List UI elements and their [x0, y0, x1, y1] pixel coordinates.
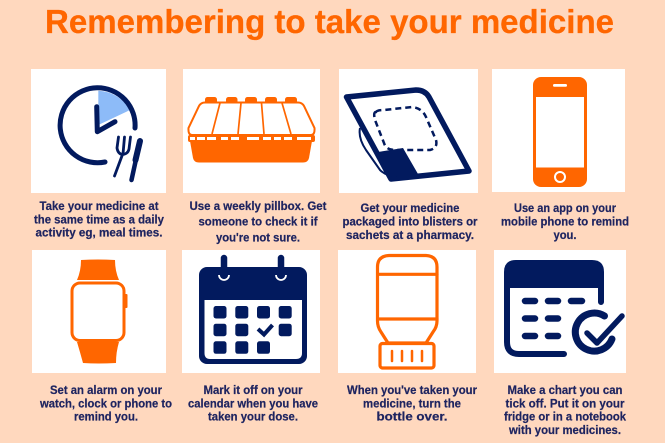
caption: Use a weekly pillbox. Get: [190, 201, 327, 213]
title: Remembering to take your medicine: [45, 4, 614, 41]
caption: the same time as a daily: [34, 214, 165, 226]
card: [31, 69, 166, 193]
panel: weekly pillbox: [183, 69, 327, 245]
caption: Get your medicine: [360, 203, 460, 215]
card: [338, 250, 476, 373]
caption: [347, 385, 478, 424]
caption: When you've taken your: [347, 385, 478, 397]
caption: with your medicines.: [508, 425, 621, 437]
icon: pillbox: [188, 97, 315, 162]
card: [182, 250, 320, 373]
caption: bottle over.: [376, 412, 448, 424]
icon: mobile phone: [533, 77, 587, 187]
panel: turn bottle over: [338, 250, 478, 424]
caption: activity eg, meal times.: [36, 228, 162, 240]
caption: someone to check it if: [198, 217, 318, 229]
caption: sachets at a pharmacy.: [346, 230, 474, 242]
panel: calendar: [182, 250, 320, 424]
icon: smart watch: [72, 260, 128, 364]
panel: phone app: [492, 69, 629, 242]
caption: taken your dose.: [208, 412, 298, 424]
caption: [188, 385, 318, 424]
icon: chart with tick: [504, 260, 622, 354]
caption: Make a chart you can: [508, 385, 622, 397]
panel: blister packs: [339, 69, 478, 242]
caption: Mark it off on your: [204, 385, 303, 397]
icon: calendar: [199, 258, 307, 364]
card: [339, 69, 478, 193]
caption: [342, 203, 478, 242]
caption: [190, 201, 327, 245]
icon: upturned bottle: [378, 256, 437, 368]
caption: Use an app on your: [514, 203, 616, 215]
panel: same time as meal: [31, 69, 166, 240]
icon: clock with cutlery: [60, 88, 140, 180]
caption: mobile phone to remind: [501, 217, 629, 229]
icon: blister pack: [346, 90, 469, 179]
card: [494, 250, 626, 373]
caption: Take your medicine at: [40, 201, 159, 213]
caption: fridge or in a notebook: [504, 412, 627, 424]
caption: [39, 385, 172, 424]
card: [183, 69, 320, 193]
caption: calendar when you have: [188, 398, 318, 410]
caption: medicine, turn the: [363, 398, 461, 410]
caption: tick off. Put it on your: [506, 398, 625, 410]
caption: [34, 201, 165, 240]
panel: tick-off chart: [494, 250, 627, 437]
caption: remind you.: [74, 412, 138, 424]
caption: [501, 203, 629, 242]
caption: you're not sure.: [216, 233, 300, 245]
caption: you.: [554, 230, 576, 242]
caption: packaged into blisters or: [342, 217, 478, 229]
caption: watch, clock or phone to: [39, 398, 172, 410]
panel: watch alarm: [32, 250, 172, 424]
card: [32, 250, 166, 373]
caption: [504, 385, 627, 437]
card: [492, 69, 625, 192]
caption: Set an alarm on your: [50, 385, 163, 397]
